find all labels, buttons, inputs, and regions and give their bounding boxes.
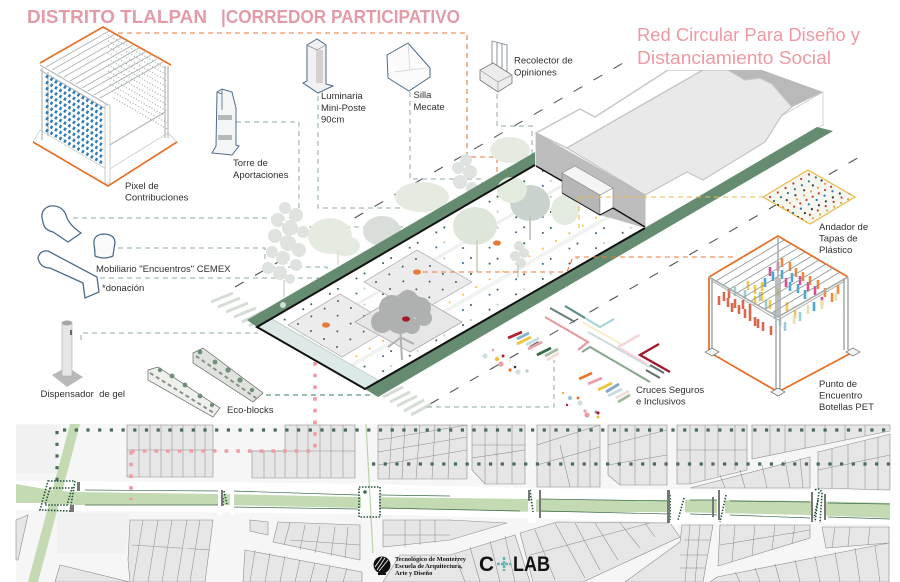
label: Recolector de Opiniones: Opiniones <box>514 68 557 78</box>
dotted route: left vertical <box>55 431 59 482</box>
logo: CoLAB: LAB <box>513 553 550 576</box>
posts and beams <box>709 238 848 390</box>
bars: right group <box>579 373 630 402</box>
road dashed line: lower <box>430 152 868 404</box>
label: Punto de Encuentro Botellas PET: Botellas PET <box>819 402 874 413</box>
tree on plaza entry <box>280 302 286 308</box>
plaza site <box>255 164 646 390</box>
hanging bottles <box>719 258 838 335</box>
icon: recolector <box>480 41 512 92</box>
label: Punto de Encuentro Botellas PET: Encuentro <box>819 390 862 402</box>
label: Recolector de Opiniones: Recolector de <box>514 56 573 66</box>
label: Andador de Tapas de Plastico: Andador de <box>819 222 868 233</box>
frame <box>40 65 168 146</box>
icon: torre <box>212 89 239 155</box>
label: Luminaria Mini-Poste 90cm: Luminaria <box>321 91 363 102</box>
panel: square 1 <box>288 294 394 357</box>
safe crossing lines <box>545 306 670 382</box>
icon: pixel pavilion <box>33 27 177 186</box>
map dots at crossing <box>363 490 367 494</box>
label: Torre de Aportaciones: Torre de <box>233 158 268 169</box>
building end wall <box>645 92 823 228</box>
label: Silla Mecate: Silla <box>414 90 431 101</box>
label: Punto de Encuentro Botellas PET: Punto de <box>819 379 857 390</box>
subtitle <box>630 22 865 70</box>
icon: long bench <box>38 251 99 298</box>
roof slats <box>46 31 163 98</box>
panel: square 3 with tree <box>355 290 462 360</box>
logo: Tecnologico de Monterrey: Tecnológico de Monterrey <box>395 556 467 563</box>
panel: square 2 <box>364 250 472 313</box>
connector: pixel orange <box>118 33 497 243</box>
icon: stool <box>94 234 115 258</box>
dotted route: pink connection <box>131 362 316 500</box>
dotted route: upper row <box>63 428 890 432</box>
label: Dispensador de gel: Dispensador de gel <box>40 389 125 400</box>
bike lane <box>258 319 378 389</box>
dots: right group <box>562 392 600 418</box>
marker: orange 2 <box>413 269 421 275</box>
icon: PET pavilion <box>705 236 860 396</box>
label: Luminaria Mini-Poste 90cm: 90cm <box>321 114 344 126</box>
label: Cruces Seguros e Inclusivos: Cruces Seguros <box>636 385 704 396</box>
logo: Tecnologico de Monterrey: Arte y Diseño <box>395 570 432 577</box>
icon: bench curve <box>42 206 81 242</box>
marker: orange 3 <box>493 240 501 246</box>
plaza dot grid <box>284 170 632 372</box>
post feet <box>705 348 860 396</box>
intersections: dotted crossings <box>40 481 822 523</box>
building <box>536 70 823 228</box>
blue contributions wall <box>46 76 104 164</box>
back hanging curtain <box>108 35 167 129</box>
plaza black edges <box>257 165 645 389</box>
map: street plan of the corridor <box>16 362 890 582</box>
cross streets <box>220 482 232 515</box>
label: Silla Mecate: Mecate <box>414 102 445 113</box>
icon: luminaria <box>303 39 333 93</box>
trees: behind the plaza <box>262 137 530 297</box>
connector: tapas yellow <box>579 197 763 228</box>
green strip: south side <box>365 127 833 397</box>
logo: Tecnologico de Monterrey: Escuela de Arquitectura, <box>395 563 463 570</box>
label: Torre de Aportaciones: Aportaciones <box>233 170 289 181</box>
subtitle: Red Circular Para Diseño y <box>637 25 860 45</box>
panel dots <box>298 259 456 347</box>
label: donacion: *donación <box>102 283 144 294</box>
roof slats <box>716 240 840 313</box>
building roof <box>567 70 792 195</box>
bars: left group <box>508 332 559 360</box>
icon: silla mecate <box>387 43 430 91</box>
building corner recess <box>728 70 823 107</box>
diagonal green avenue <box>28 424 80 582</box>
map: pale open areas <box>16 425 130 553</box>
vertical green lane <box>366 424 373 553</box>
marker: orange 1 <box>322 322 330 328</box>
icon: eco-blocks <box>148 348 263 417</box>
green strip: north side <box>247 152 535 327</box>
label: Cruces Seguros e Inclusivos: e Inclusivos <box>636 396 686 408</box>
title <box>27 7 460 27</box>
title: DISTRITO TLALPAN <box>27 7 207 27</box>
blocks: city lots <box>16 425 890 582</box>
orange outline <box>33 27 177 186</box>
label: Andador de Tapas de Plastico: Tapas de <box>819 234 858 244</box>
orange outline <box>709 236 853 392</box>
label: Mobiliario Encuentros CEMEX: Mobiliario "Encuentros" CEMEX <box>96 264 231 275</box>
front post <box>105 105 110 183</box>
lot subdivision lines <box>127 425 890 582</box>
logo: CoLAB: C <box>479 553 494 576</box>
crossing marks <box>70 482 826 523</box>
connector: PET orange <box>423 257 737 272</box>
building upper parapet <box>536 70 703 148</box>
dotted route: second row <box>372 462 890 466</box>
crosswalk: upper left <box>211 293 264 326</box>
icon: tapas walkway <box>763 170 855 224</box>
label: Eco-blocks: Eco-blocks <box>227 405 274 416</box>
trees inside the plaza <box>453 177 579 278</box>
base <box>33 130 177 186</box>
logo: CoLAB <box>479 553 550 576</box>
label: Andador de Tapas de Plastico: Plástico <box>819 245 852 256</box>
label: Pixel de Contribuciones: Pixel de <box>125 181 159 192</box>
median edge lines <box>85 490 890 519</box>
building front wall <box>536 133 645 228</box>
building annex <box>536 133 645 228</box>
title: |CORREDOR PARTICIPATIVO <box>221 7 460 27</box>
label: Luminaria Mini-Poste 90cm: Mini-Poste <box>321 103 366 114</box>
green median <box>16 484 890 518</box>
logo: Tecnologico de Monterrey <box>374 556 467 577</box>
road dashed line: upper <box>235 55 637 287</box>
connector lines: teal dashed <box>73 92 554 407</box>
dots: left group <box>482 349 529 375</box>
marker: red centre <box>402 316 410 322</box>
crosswalk: lower right <box>383 387 431 415</box>
subtitle: Distanciamiento Social <box>637 48 831 68</box>
road <box>16 481 890 524</box>
icon: gel dispenser <box>52 320 83 387</box>
label: Pixel de Contribuciones: Contribuciones <box>125 192 189 204</box>
connector: eco-blocks green <box>266 355 370 395</box>
